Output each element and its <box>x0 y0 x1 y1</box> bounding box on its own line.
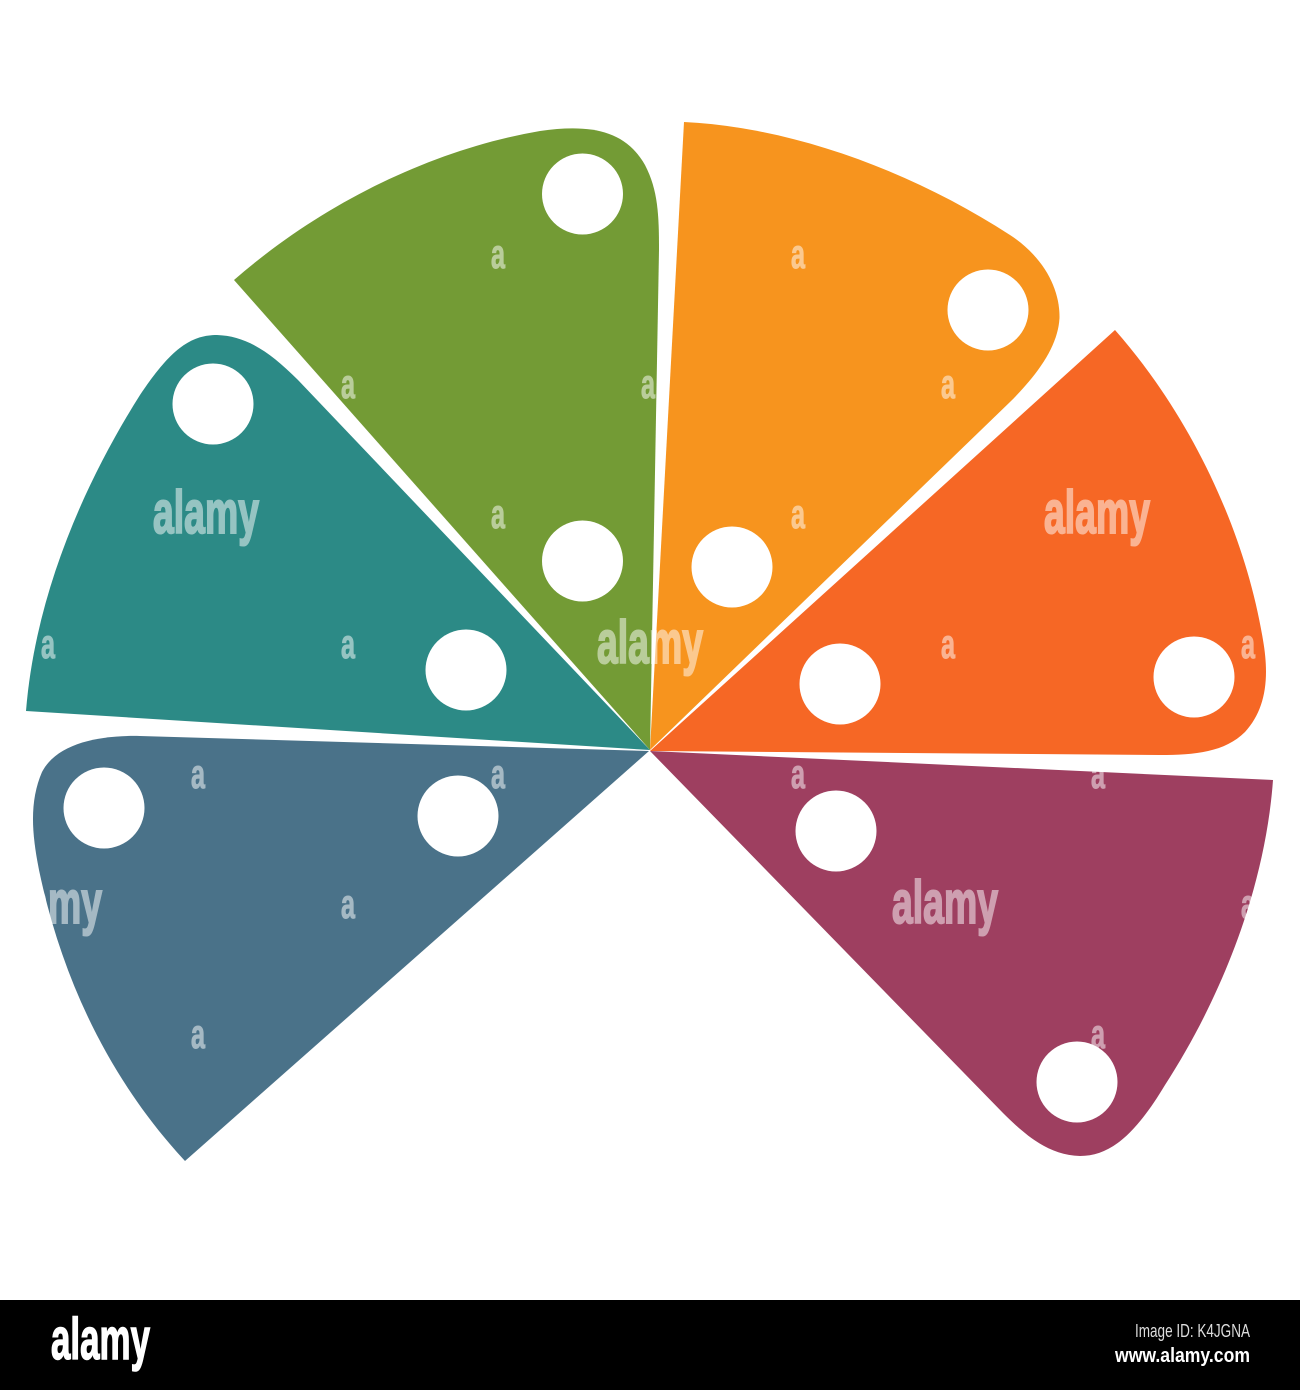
watermark: small repeated marks <box>41 231 1256 1057</box>
panel: blue segment <box>33 736 649 1161</box>
watermark: large alamy marks: alamy <box>597 609 703 676</box>
watermark: small repeated marks: a <box>941 361 956 407</box>
panel: teal segment <box>26 335 650 750</box>
watermark: small repeated marks: a <box>1241 621 1256 667</box>
watermark: large alamy marks: alamy <box>892 869 998 936</box>
watermark: small repeated marks: a <box>191 751 206 797</box>
watermark: large alamy marks: alamy <box>1044 479 1150 546</box>
watermark: large alamy marks: alamy <box>0 869 102 936</box>
watermark: large alamy marks: alamy <box>153 479 259 546</box>
watermark: small repeated marks: a <box>1091 751 1106 797</box>
watermark: small repeated marks: a <box>341 361 356 407</box>
panel: red-orange segment <box>650 330 1266 755</box>
watermark: small repeated marks: a <box>341 881 356 927</box>
footer url: www.alamy.com <box>1114 1345 1250 1367</box>
watermark: small repeated marks: a <box>341 621 356 667</box>
watermark: small repeated marks: a <box>791 231 806 277</box>
watermark: small repeated marks: a <box>1241 881 1256 927</box>
footer bar <box>0 1300 1300 1390</box>
watermark: small repeated marks: a <box>641 361 656 407</box>
watermark: small repeated marks: a <box>491 491 506 537</box>
watermark: small repeated marks: a <box>941 621 956 667</box>
footer image id: Image ID: K4JGNA <box>1135 1321 1250 1341</box>
watermark: small repeated marks: a <box>491 231 506 277</box>
watermark: small repeated marks: a <box>41 621 56 667</box>
watermark: small repeated marks: a <box>491 751 506 797</box>
panel: purple segment <box>650 751 1273 1156</box>
panel: orange segment <box>650 122 1060 750</box>
panel: green segment <box>234 128 659 750</box>
watermark: small repeated marks: a <box>791 491 806 537</box>
watermark: small repeated marks: a <box>1091 1011 1106 1057</box>
watermark: small repeated marks: a <box>791 751 806 797</box>
watermark: small repeated marks: a <box>191 1011 206 1057</box>
watermark: large alamy marks <box>0 479 1150 936</box>
footer logo: alamy <box>51 1307 150 1372</box>
